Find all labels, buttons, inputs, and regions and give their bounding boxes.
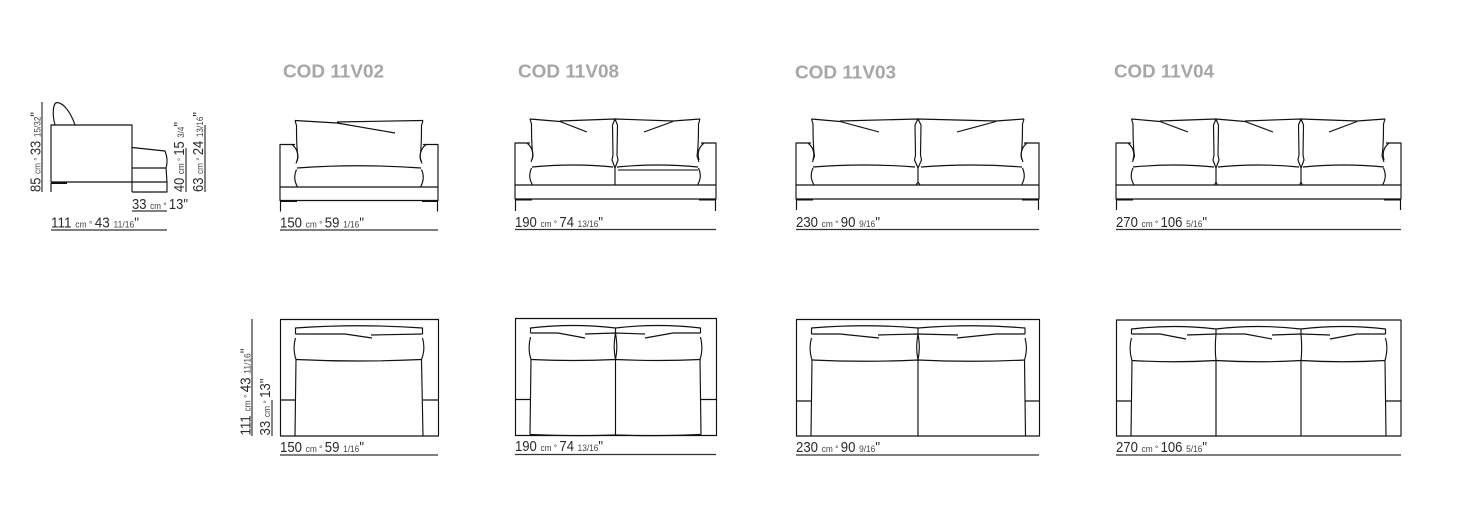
dimension: total depth: 111 cm ° 43 11/16" (51, 214, 139, 232)
dimension: arm height: 63 cm ° 24 13/16" (190, 112, 207, 192)
dimension: arm depth: 33 cm ° 13" (257, 378, 274, 436)
dimension: seat depth: 33 cm ° 13" (132, 196, 188, 213)
width label: 190 cm ° 74 13/16" (515, 438, 603, 455)
front view: 11V02 (280, 120, 438, 232)
dimension: depth: 111 cm ° 43 11/16" (238, 348, 254, 436)
width label: 270 cm ° 106 5/16" (1116, 214, 1207, 231)
top view: 11V04 (1116, 320, 1401, 456)
top view: 11V03 (796, 320, 1040, 456)
front view: 11V04 (1116, 119, 1401, 231)
front view: 11V03 (796, 119, 1039, 231)
width label: 230 cm ° 90 9/16" (796, 439, 880, 456)
width label: 150 cm ° 59 1/16" (280, 439, 364, 456)
heading: COD 11V03: COD 11V03 (795, 62, 896, 82)
width label: 150 cm ° 59 1/16" (280, 214, 364, 232)
width label: 230 cm ° 90 9/16" (796, 214, 880, 231)
width label: 190 cm ° 74 13/16" (515, 214, 603, 231)
heading: COD 11V08: COD 11V08 (518, 62, 619, 82)
sofa side profile (51, 102, 167, 192)
top view: 11V08 (515, 318, 716, 455)
dimension: total height: 85 cm ° 33 15/32" (28, 112, 44, 192)
width label: 270 cm ° 106 5/16" (1116, 439, 1207, 456)
top view: 11V02 (238, 319, 438, 456)
heading: COD 11V04: COD 11V04 (1114, 62, 1214, 82)
dimension: seat height: 40 cm ° 15 3/4" (171, 122, 188, 192)
front view: 11V08 (515, 119, 716, 231)
heading: COD 11V02: COD 11V02 (283, 62, 384, 82)
panel: side elevation (28, 102, 207, 232)
